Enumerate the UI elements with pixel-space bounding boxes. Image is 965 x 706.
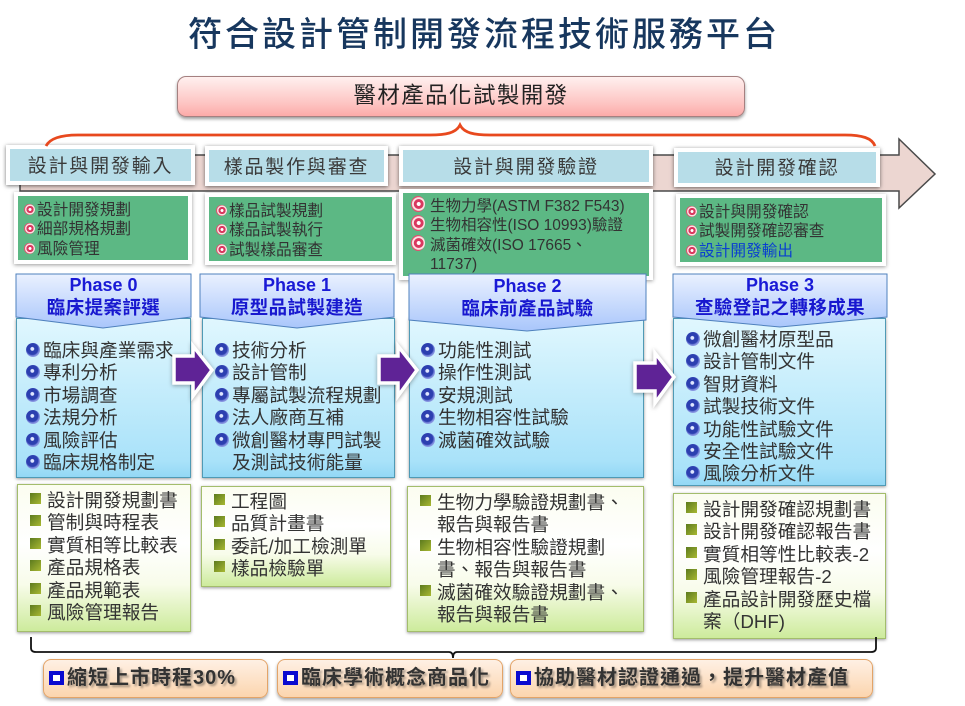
outcome: shorter time to market: 縮短上市時程30% bbox=[67, 667, 236, 689]
outcome: shorter time to market bbox=[43, 659, 268, 698]
stage heading: design verification: 設計與開發驗證 bbox=[453, 157, 599, 178]
big process arrow bbox=[19, 137, 936, 210]
phase 3 heading bbox=[695, 275, 865, 318]
panel: phase 2 documents: 報告與報告書 bbox=[437, 514, 549, 535]
panel: phase 2 activities: 操作性測試 bbox=[438, 362, 531, 383]
panel: phase 3 documents: 案（DHF) bbox=[703, 611, 785, 632]
green task box 2: 生物力學(ASTM F382 F543) bbox=[430, 198, 625, 215]
panel: phase 1 activities: 專屬試製流程規劃 bbox=[232, 385, 382, 406]
stage heading: design validation: 設計開發確認 bbox=[715, 158, 839, 179]
phase 2 heading: 臨床前產品試驗 bbox=[461, 298, 594, 319]
stage heading: sample production bbox=[205, 146, 388, 186]
panel: phase 1 activities: 微創醫材專門試製 bbox=[232, 430, 382, 451]
panel: phase 2 documents: 報告與報告書 bbox=[437, 604, 549, 625]
panel: phase 3 activities: 功能性試驗文件 bbox=[703, 419, 834, 440]
green task box 0: 風險管理 bbox=[37, 241, 100, 258]
title: 符合設計管制開發流程技術服務平台 bbox=[188, 16, 780, 54]
panel: phase 3 documents: 設計開發確認報告書 bbox=[703, 521, 871, 542]
panel: phase 0 documents: 實質相等比較表 bbox=[47, 535, 178, 556]
panel: phase 1 documents bbox=[201, 486, 391, 587]
panel: phase 2 documents: 滅菌確效驗證規劃書、 bbox=[437, 582, 624, 603]
panel: phase 1 activities: 及測試技術能量 bbox=[232, 452, 363, 473]
panel: phase 1 activities: 技術分析 bbox=[232, 340, 307, 361]
phase 3 heading: 查驗登記之轉移成果 bbox=[695, 297, 865, 318]
panel: phase 2 activities: 滅菌確效試驗 bbox=[438, 430, 550, 451]
brace: design stages bbox=[44, 122, 876, 147]
phase 1 heading: 原型品試製建造 bbox=[231, 297, 363, 318]
panel: phase 1 documents: 樣品檢驗單 bbox=[231, 558, 324, 579]
green task box 2: 滅菌確效(ISO 17665、 bbox=[430, 237, 587, 254]
panel: phase 0 documents: 產品規範表 bbox=[47, 580, 140, 601]
panel: phase 2 documents: 生物相容性驗證規劃 bbox=[437, 537, 605, 558]
panel: phase 2 activities bbox=[409, 318, 644, 478]
panel: phase 0 activities: 臨床與產業需求 bbox=[43, 340, 174, 361]
panel: phase 2 activities: 安規測試 bbox=[438, 385, 513, 406]
panel: phase 1 activities bbox=[202, 318, 395, 478]
top banner: 醫材產品化試製開發 bbox=[353, 83, 569, 108]
green task box 2 bbox=[399, 189, 653, 280]
stage heading: design input bbox=[6, 145, 195, 185]
arrow: phase 1 to 2 bbox=[374, 342, 421, 402]
phase header shapes bbox=[16, 274, 888, 332]
stage heading: design verification bbox=[399, 146, 653, 186]
brace: outcomes bbox=[30, 637, 877, 658]
green task box 0: 設計開發規劃 bbox=[37, 202, 131, 219]
panel: phase 3 activities: 智財資料 bbox=[703, 374, 778, 395]
phase 2 heading bbox=[461, 276, 594, 319]
green task box 3: 設計與開發確認 bbox=[699, 204, 809, 221]
phase 3 heading: Phase 3 bbox=[746, 275, 814, 295]
green task box 2: 生物相容性(ISO 10993)驗證 bbox=[430, 217, 623, 234]
panel: phase 2 activities: 生物相容性試驗 bbox=[438, 407, 569, 428]
panel: phase 3 documents bbox=[673, 493, 886, 639]
green task box 3: 試製開發確認審查 bbox=[699, 223, 824, 240]
green task box 0 bbox=[14, 192, 192, 264]
panel: phase 3 documents: 設計開發確認規劃書 bbox=[703, 499, 871, 520]
panel: phase 0 activities: 風險評估 bbox=[43, 430, 118, 451]
panel: phase 0 activities: 法規分析 bbox=[43, 407, 118, 428]
outcome: commercialised clinical concepts: 臨床學術概念商品化 bbox=[301, 667, 490, 689]
panel: phase 0 activities: 市場調查 bbox=[43, 385, 118, 406]
panel: phase 3 activities: 安全性試驗文件 bbox=[703, 441, 834, 462]
panel: phase 3 activities: 微創醫材原型品 bbox=[703, 329, 834, 350]
panel: phase 1 documents: 工程圖 bbox=[231, 491, 287, 512]
panel: phase 0 documents: 風險管理報告 bbox=[47, 602, 159, 623]
panel: phase 3 activities: 風險分析文件 bbox=[703, 463, 815, 484]
panel: phase 3 activities bbox=[673, 318, 886, 486]
panel: phase 2 documents: 生物力學驗證規劃書、 bbox=[437, 492, 624, 513]
outcome: certification support: 協助醫材認證通過，提升醫材產值 bbox=[534, 667, 849, 689]
green task box 1: 試製樣品審查 bbox=[229, 242, 323, 259]
outcome: commercialised clinical concepts bbox=[277, 659, 503, 698]
top banner bbox=[177, 76, 745, 117]
panel: phase 3 documents: 風險管理報告-2 bbox=[703, 566, 832, 587]
panel: phase 3 documents: 產品設計開發歷史檔 bbox=[703, 589, 871, 610]
phase 1 heading bbox=[231, 275, 363, 318]
phase 0 heading: Phase 0 bbox=[69, 275, 138, 295]
panel: phase 0 activities bbox=[16, 318, 191, 478]
panel: phase 1 activities: 設計管制 bbox=[232, 362, 307, 383]
stage heading: design validation bbox=[674, 148, 880, 187]
panel: phase 0 documents: 設計開發規劃書 bbox=[47, 490, 178, 511]
outcome: certification support bbox=[510, 659, 873, 698]
green task box 3: 設計開發輸出 bbox=[699, 243, 793, 260]
panel: phase 0 documents bbox=[17, 484, 191, 632]
panel: phase 1 documents: 品質計畫書 bbox=[231, 513, 324, 534]
stage heading: design input: 設計與開發輸入 bbox=[28, 156, 173, 177]
panel: phase 1 documents: 委託/加工檢測單 bbox=[231, 536, 367, 557]
panel: phase 3 documents: 實質相等性比較表-2 bbox=[703, 544, 869, 565]
panel: phase 0 activities: 專利分析 bbox=[43, 362, 118, 383]
green task box 0: 細部規格規劃 bbox=[37, 221, 131, 238]
green task box 1: 樣品試製規劃 bbox=[229, 203, 323, 220]
panel: phase 0 documents: 管制與時程表 bbox=[47, 512, 159, 533]
green task box 1 bbox=[205, 193, 396, 265]
phase 2 heading: Phase 2 bbox=[493, 276, 562, 296]
arrow: phase 0 to 1 bbox=[170, 341, 216, 402]
panel: phase 3 activities: 試製技術文件 bbox=[703, 396, 815, 417]
green task box 2: 11737) bbox=[430, 256, 477, 273]
panel: phase 2 documents bbox=[407, 486, 644, 632]
stage heading: sample production: 樣品製作與審查 bbox=[224, 157, 369, 178]
panel: phase 0 documents: 產品規格表 bbox=[47, 557, 140, 578]
panel: phase 2 documents: 書、報告與報告書 bbox=[437, 559, 586, 580]
green task box 3 bbox=[676, 194, 886, 266]
phase 0 heading bbox=[47, 275, 160, 318]
panel: phase 3 activities: 設計管制文件 bbox=[703, 351, 815, 372]
phase 1 heading: Phase 1 bbox=[263, 275, 331, 295]
panel: phase 2 activities: 功能性測試 bbox=[438, 340, 531, 361]
arrow: phase 2 to 3 bbox=[630, 348, 678, 410]
phase 0 heading: 臨床提案評選 bbox=[47, 297, 160, 318]
panel: phase 0 activities: 臨床規格制定 bbox=[43, 452, 155, 473]
green task box 1: 樣品試製執行 bbox=[229, 222, 323, 239]
panel: phase 1 activities: 法人廠商互補 bbox=[232, 407, 344, 428]
